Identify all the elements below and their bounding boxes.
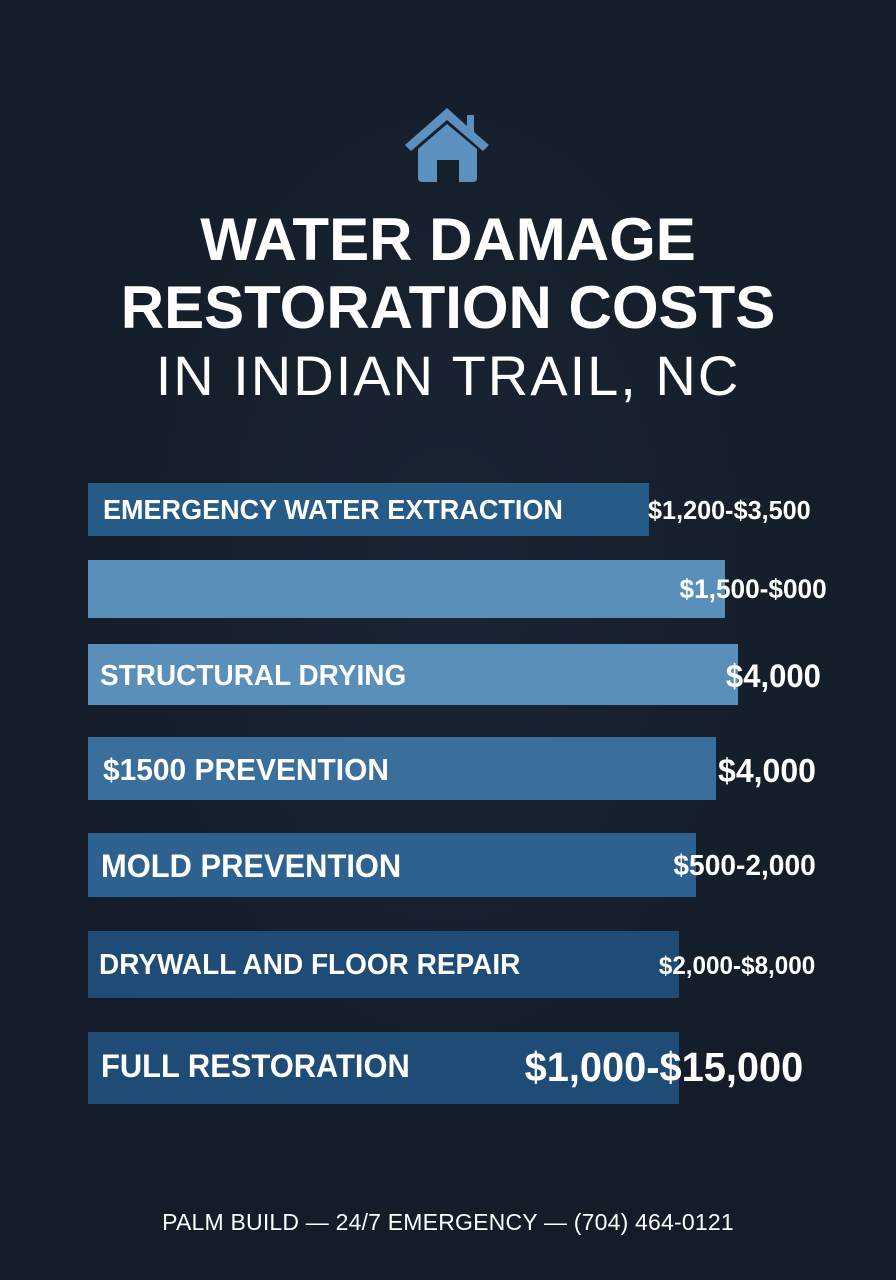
row: drywall and floor repair: DRYWALL AND FLOOR REPAIR [99,949,520,981]
subtitle: IN INDIAN TRAIL, NC [156,344,740,407]
row: drywall and floor repair [88,931,815,998]
title: RESTORATION COSTS [121,274,775,341]
row: second bar [88,560,827,618]
row: mold prevention: MOLD PREVENTION [101,848,401,884]
title: WATER DAMAGE [200,206,696,273]
footer: PALM BUILD — 24/7 EMERGENCY — (704) 464-0121 [162,1209,734,1235]
row: structural drying [88,644,821,705]
row: drywall and floor repair: $2,000-$8,000 [659,952,815,980]
row: full restoration: $1,000-$15,000 [524,1044,803,1090]
row: $1500 prevention: $1500 PREVENTION [103,752,389,787]
row: emergency water extraction: $1,200-$3,500 [648,495,811,525]
row: $1500 prevention: $4,000 [718,752,816,789]
row: structural drying: STRUCTURAL DRYING [100,660,406,692]
row: emergency water extraction [88,483,811,536]
bar chart [88,483,828,1108]
title [121,206,775,341]
row: full restoration [88,1032,803,1104]
row: structural drying: $4,000 [726,658,821,694]
row: full restoration: FULL RESTORATION [101,1048,410,1084]
row: emergency water extraction: EMERGENCY WATER EXTRACTION [103,494,563,525]
row: mold prevention [88,833,816,897]
row: $1500 prevention [88,737,816,800]
icon: house [405,108,489,182]
row: mold prevention: $500-2,000 [674,850,816,882]
row: second bar: $1,500-$000 [680,574,827,604]
